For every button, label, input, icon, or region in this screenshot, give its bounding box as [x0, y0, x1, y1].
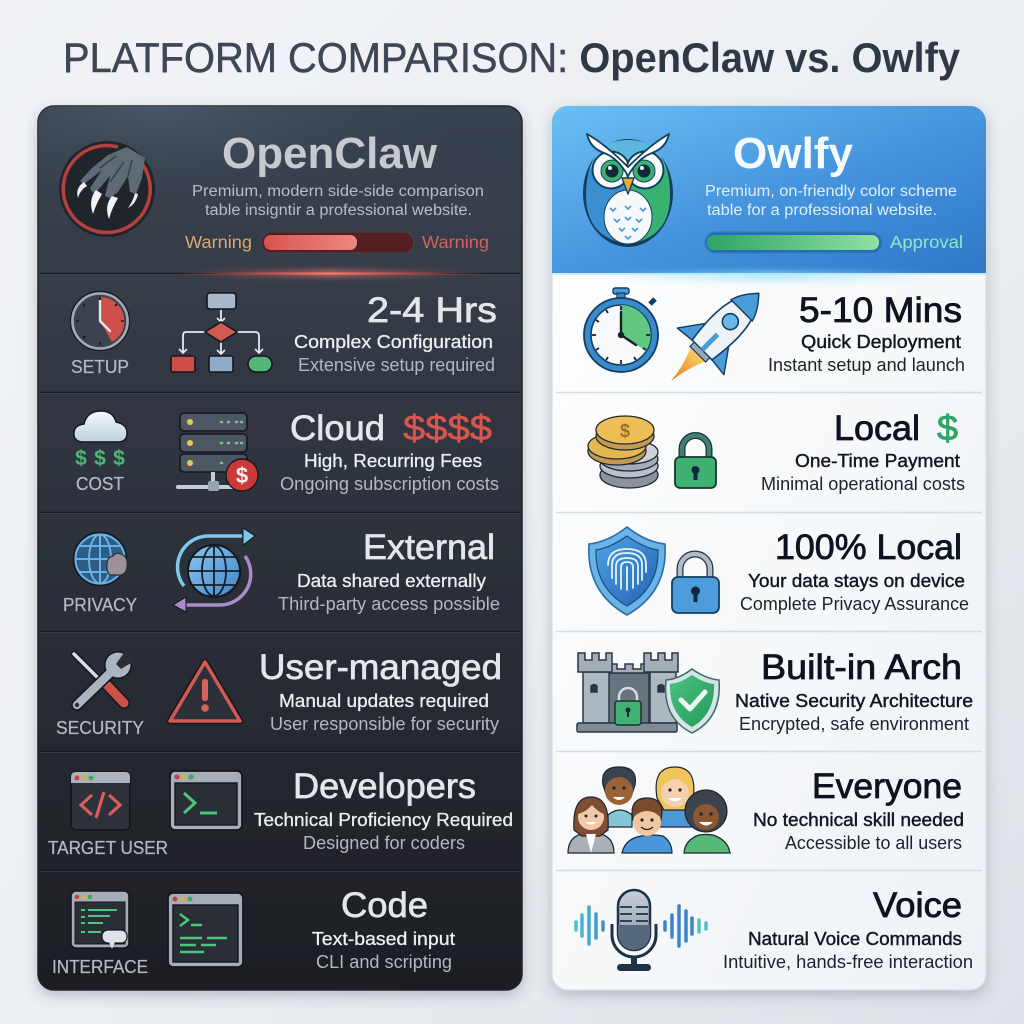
icon: blue lock	[672, 554, 719, 613]
label: setup: SETUP	[71, 357, 129, 377]
row: privacy	[63, 528, 500, 615]
icon: globe with cloud	[74, 532, 127, 586]
deployment text	[768, 291, 965, 375]
icon: cloud with dollars	[74, 411, 127, 470]
interface text: Intuitive, hands-free interaction	[723, 952, 973, 972]
OpenClaw name: OpenClaw	[222, 129, 438, 178]
icon: globe with data arrows	[173, 528, 255, 612]
interface text	[723, 886, 973, 972]
row: interface	[52, 886, 455, 977]
person: right	[684, 790, 730, 853]
label: interface: INTERFACE	[52, 957, 148, 977]
OpenClaw description: table insigntir a professional website.	[205, 202, 472, 219]
cost text: Cloud	[290, 409, 385, 448]
icon: green lock	[675, 436, 716, 488]
icon: terminal window	[170, 771, 242, 830]
icon: claw logo	[59, 141, 155, 237]
target user text	[753, 767, 964, 853]
target user text: Developers	[293, 767, 476, 806]
privacy text	[740, 528, 969, 614]
privacy text: Data shared externally	[297, 571, 486, 591]
row: setup	[70, 291, 497, 377]
target user text: Technical Proficiency Required	[254, 810, 513, 830]
security text: Encrypted, safe environment	[739, 714, 969, 734]
warning meter: Warning	[422, 232, 489, 252]
icon: castle	[577, 653, 678, 732]
row: target user	[568, 767, 964, 853]
icon: warning triangle	[170, 662, 240, 721]
warning meter: Warning	[185, 232, 252, 252]
row: interface	[576, 886, 973, 972]
interface text: CLI and scripting	[316, 952, 452, 972]
row: security	[577, 648, 973, 734]
interface text: Natural Voice Commands	[748, 929, 962, 949]
deployment text: 5-10 Mins	[799, 291, 962, 330]
panel: OpenClaw	[38, 106, 522, 990]
target user text: Accessible to all users	[785, 833, 962, 853]
security text: User responsible for security	[270, 714, 499, 734]
row: cost	[74, 409, 499, 494]
icon: flowchart	[171, 293, 272, 372]
target user text: Designed for coders	[303, 833, 465, 853]
label: cost: COST	[76, 474, 124, 494]
row: privacy	[589, 527, 969, 615]
interface text: Text-based input	[312, 929, 455, 949]
icon: stopwatch	[584, 288, 658, 372]
setup text: Complex Configuration	[294, 332, 493, 352]
Owlfy name: Owlfy	[733, 129, 854, 178]
security text: Manual updates required	[279, 691, 489, 711]
privacy text: External	[363, 528, 495, 567]
setup text: 2-4 Hrs	[367, 291, 497, 330]
icon: CLI window	[168, 893, 243, 967]
cost text: Minimal operational costs	[761, 474, 965, 494]
security text	[259, 648, 502, 734]
setup text: Extensive setup required	[298, 355, 495, 375]
setup text	[294, 291, 497, 375]
panel: Owlfy	[552, 106, 986, 990]
icon: diverse user group	[568, 767, 730, 853]
icon: editor with speech bubble	[71, 891, 129, 949]
person: back left	[603, 767, 635, 827]
Owlfy description	[705, 183, 957, 219]
target user text: Everyone	[812, 767, 962, 806]
cost text: Ongoing subscription costs	[280, 474, 499, 494]
target user text	[254, 767, 513, 853]
privacy text: Third-party access possible	[278, 594, 500, 614]
OpenClaw description: Premium, modern side-side comparison	[192, 183, 484, 200]
label: target user: TARGET USER	[48, 838, 168, 858]
interface text	[312, 886, 455, 972]
security text: Built-in Arch	[761, 648, 962, 687]
icon: microphone	[612, 890, 656, 971]
privacy text	[278, 528, 500, 614]
label: security: SECURITY	[56, 718, 144, 738]
cost text: $	[937, 409, 958, 448]
security text	[735, 648, 973, 734]
interface text: Code	[341, 886, 428, 925]
row: deployment	[584, 270, 965, 404]
cost text: High, Recurring Fees	[304, 451, 482, 471]
cost text: $$$$	[403, 409, 492, 448]
privacy text: Your data stays on device	[748, 571, 965, 591]
icon: server with cost badge: $	[236, 463, 248, 488]
label: privacy: PRIVACY	[63, 595, 137, 615]
icon: tools	[74, 650, 136, 707]
approval meter	[705, 232, 963, 253]
deployment text: Instant setup and launch	[768, 355, 965, 375]
security text: Native Security Architecture	[735, 691, 973, 711]
row: target user	[48, 767, 513, 858]
icon: fingerprint shield	[589, 527, 665, 615]
target user text: No technical skill needed	[753, 810, 964, 830]
Owlfy description: table for a professional website.	[707, 202, 937, 219]
Owlfy header	[583, 129, 963, 253]
icon: clock	[70, 292, 130, 350]
title: PLATFORM COMPARISON: OpenClaw vs. Owlfy	[63, 34, 961, 81]
icon: cloud with dollars: $	[113, 447, 125, 470]
icon: coins: $	[620, 421, 630, 441]
icon: rocket	[648, 270, 782, 404]
cost text	[761, 409, 965, 494]
icon: cloud with dollars: $	[94, 447, 106, 470]
icon: cloud with dollars: $	[75, 447, 87, 470]
icon: sound waves left	[576, 907, 603, 944]
icon: green check shield	[666, 669, 719, 733]
deployment text: Quick Deployment	[801, 332, 961, 352]
privacy text: 100% Local	[775, 528, 962, 567]
cost text	[280, 409, 499, 494]
icon: code window	[71, 772, 130, 830]
approval meter: Approval	[890, 232, 963, 252]
person: left	[568, 797, 614, 853]
OpenClaw header	[59, 129, 489, 253]
Owlfy description: Premium, on-friendly color scheme	[705, 183, 957, 200]
interface text: Voice	[873, 886, 962, 925]
icon: coins	[588, 416, 658, 488]
OpenClaw description	[192, 183, 484, 219]
warning meter	[185, 232, 489, 253]
security text: User-managed	[259, 648, 502, 687]
row: cost	[588, 409, 965, 494]
icon: sound waves right	[665, 906, 706, 946]
person: back right	[655, 767, 695, 827]
person: center	[622, 798, 672, 853]
icon: server with cost badge	[176, 413, 258, 491]
icon: owl logo	[583, 134, 673, 247]
cost text: Local	[834, 409, 920, 448]
privacy text: Complete Privacy Assurance	[740, 594, 969, 614]
cost text: One-Time Payment	[795, 451, 960, 471]
row: security	[56, 648, 502, 738]
